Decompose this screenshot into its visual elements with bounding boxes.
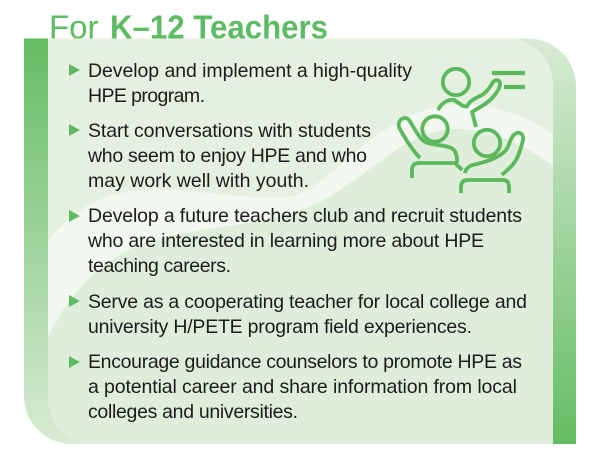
bullet 2: Start conversations with students (88, 120, 371, 142)
bullet 5: Encourage guidance counselors to promote HPE as (88, 351, 522, 373)
bullet 5 (69, 351, 522, 423)
student right (461, 130, 523, 193)
bullet 2 (69, 120, 371, 192)
right gradient bar (490, 38, 576, 444)
inner panel with waves (48, 38, 553, 445)
bullet list (69, 60, 527, 423)
teacher (438, 69, 525, 127)
bullet 1: Develop and implement a high-quality (88, 60, 412, 82)
icon: teacher and students (399, 69, 525, 193)
bullet 2: who seem to enjoy HPE and who (87, 145, 367, 167)
bullet 5: colleges and universities. (88, 401, 298, 423)
bullet 5: a potential career and share information from local (88, 376, 517, 398)
title: K–12 Teachers (110, 8, 328, 46)
bullet 2: may work well with youth. (88, 170, 309, 192)
bullet 1 (69, 60, 412, 107)
student left (399, 116, 462, 178)
bullet 3: who are interested in learning more about HPE (87, 230, 484, 252)
bullet 4 (69, 291, 527, 338)
title: For (49, 8, 99, 46)
bullet 3: teaching careers. (88, 255, 231, 277)
bullet 4: Serve as a cooperating teacher for local college and (88, 291, 527, 313)
bullet 3: Develop a future teachers club and recruit students (88, 205, 522, 227)
bullet 3 (69, 205, 522, 277)
bullet 4: university H/PETE program field experiences. (88, 316, 472, 338)
left gradient bar (24, 38, 100, 444)
bullet 1: HPE program. (88, 85, 205, 107)
